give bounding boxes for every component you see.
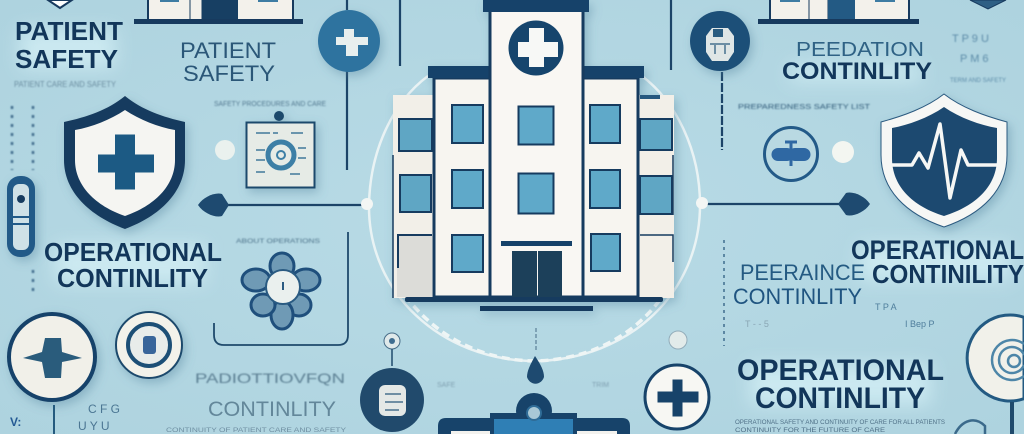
central tower xyxy=(483,0,589,298)
faint notes centre right xyxy=(745,302,935,329)
fine print lower right xyxy=(735,420,945,434)
faint captions beside clipboard xyxy=(437,382,609,389)
faint heading: institution continuity: PADIOTTIOVFQN xyxy=(195,370,345,386)
bottom-left marks: C F G xyxy=(88,402,120,416)
faint notes centre right: I Bep P xyxy=(905,319,935,329)
preparedness bracket dots xyxy=(723,240,725,346)
caption above flower icon: ABOUT OPERATIONS xyxy=(236,239,320,245)
small pin left xyxy=(384,333,400,366)
fine print lower right: OPERATIONAL SAFETY AND CONTINUITY OF CARE FOR ALL PATIENTS xyxy=(735,420,945,426)
faint continuity label: CONTINLITY xyxy=(208,398,336,421)
heading: performance continuity: CONTINLITY xyxy=(733,284,862,309)
connector leaf right xyxy=(838,192,870,216)
connection nodes xyxy=(361,197,708,210)
connector lines xyxy=(225,0,842,205)
heading: preparation continuity: PEEDATION xyxy=(796,39,924,61)
heading: patient safety bold: SAFETY xyxy=(15,44,118,74)
icon: ring with symbol xyxy=(764,128,818,180)
top-left building fragment xyxy=(134,0,303,24)
connector leaf left xyxy=(198,193,229,217)
icon: blue medical badge xyxy=(318,10,380,72)
badge: spiral xyxy=(967,315,1024,401)
faint notes top right: P M 6 xyxy=(960,53,989,65)
caption under patient safety: PATIENT CARE AND SAFETY xyxy=(14,80,117,89)
faint notes top right: T P 9 U xyxy=(952,33,989,45)
panel icon: checklist xyxy=(246,111,314,188)
faint captions beside clipboard: TRIM xyxy=(592,382,609,389)
faint notes top right: TERM AND SAFETY xyxy=(950,78,1006,84)
bottom-left marks xyxy=(10,402,120,433)
dotted side marks xyxy=(12,106,33,296)
heading: patient safety bold: PATIENT xyxy=(15,16,123,46)
back left wing xyxy=(393,95,435,298)
icon: id badge pill xyxy=(7,176,35,257)
right wing xyxy=(583,66,644,297)
icon: flower xyxy=(242,253,320,329)
top shield tips xyxy=(48,0,1006,9)
heading: operational continuity left: CONTINLITY xyxy=(57,263,208,293)
faint captions beside clipboard: SAFE xyxy=(437,382,456,389)
icon: plus badge xyxy=(645,365,709,429)
bottom-left marks: V: xyxy=(10,415,21,429)
hospital circle xyxy=(369,76,700,361)
building base xyxy=(405,297,663,302)
badge: ring xyxy=(116,312,182,378)
faint notes centre right: T - - 5 xyxy=(745,319,769,329)
heading: operational continuity left: OPERATIONAL xyxy=(44,237,222,267)
caption above panel icon: SAFETY PROCEDURES AND CARE xyxy=(214,101,326,108)
teardrop node xyxy=(527,356,544,384)
small pin right xyxy=(669,331,687,349)
back right wing xyxy=(638,95,674,298)
bracket around flower icon xyxy=(214,232,348,345)
fine print lower right: CONTINUITY FOR THE FUTURE OF CARE xyxy=(735,428,885,434)
stem under compass xyxy=(53,405,55,434)
bottom-left marks: U Y U xyxy=(78,419,110,433)
icon: navy medical badge xyxy=(690,11,750,71)
caption bottom centre-left: CONTINUITY OF PATIENT CARE AND SAFETY xyxy=(166,428,346,434)
heading: preparation continuity: CONTINLITY xyxy=(782,58,932,85)
heading: patient safety light: PATIENT xyxy=(180,38,276,63)
glow dot left xyxy=(215,140,235,160)
heading: operational continuity lower: OPERATIONAL xyxy=(737,354,944,387)
shield with cross xyxy=(64,96,185,229)
stem line xyxy=(535,328,537,352)
badge: compass xyxy=(9,314,95,400)
caption above right badge: PREPAREDNESS SAFETY LIST xyxy=(738,104,871,111)
left wing xyxy=(428,66,490,297)
heading: patient safety light: SAFETY xyxy=(183,61,275,86)
stethoscope fragment xyxy=(955,402,1012,434)
icon: navy document badge xyxy=(360,368,424,432)
shield with heartbeat xyxy=(881,94,1007,227)
glow dot right xyxy=(832,141,854,163)
heading: operational continuity lower: CONTINLITY xyxy=(755,382,925,415)
hospital building xyxy=(393,0,674,311)
top-right building fragment xyxy=(758,0,919,24)
icon: clipboard xyxy=(438,393,630,434)
heading: performance continuity: PEERAINCE xyxy=(740,260,865,285)
faint notes centre right: T P A xyxy=(875,302,897,312)
